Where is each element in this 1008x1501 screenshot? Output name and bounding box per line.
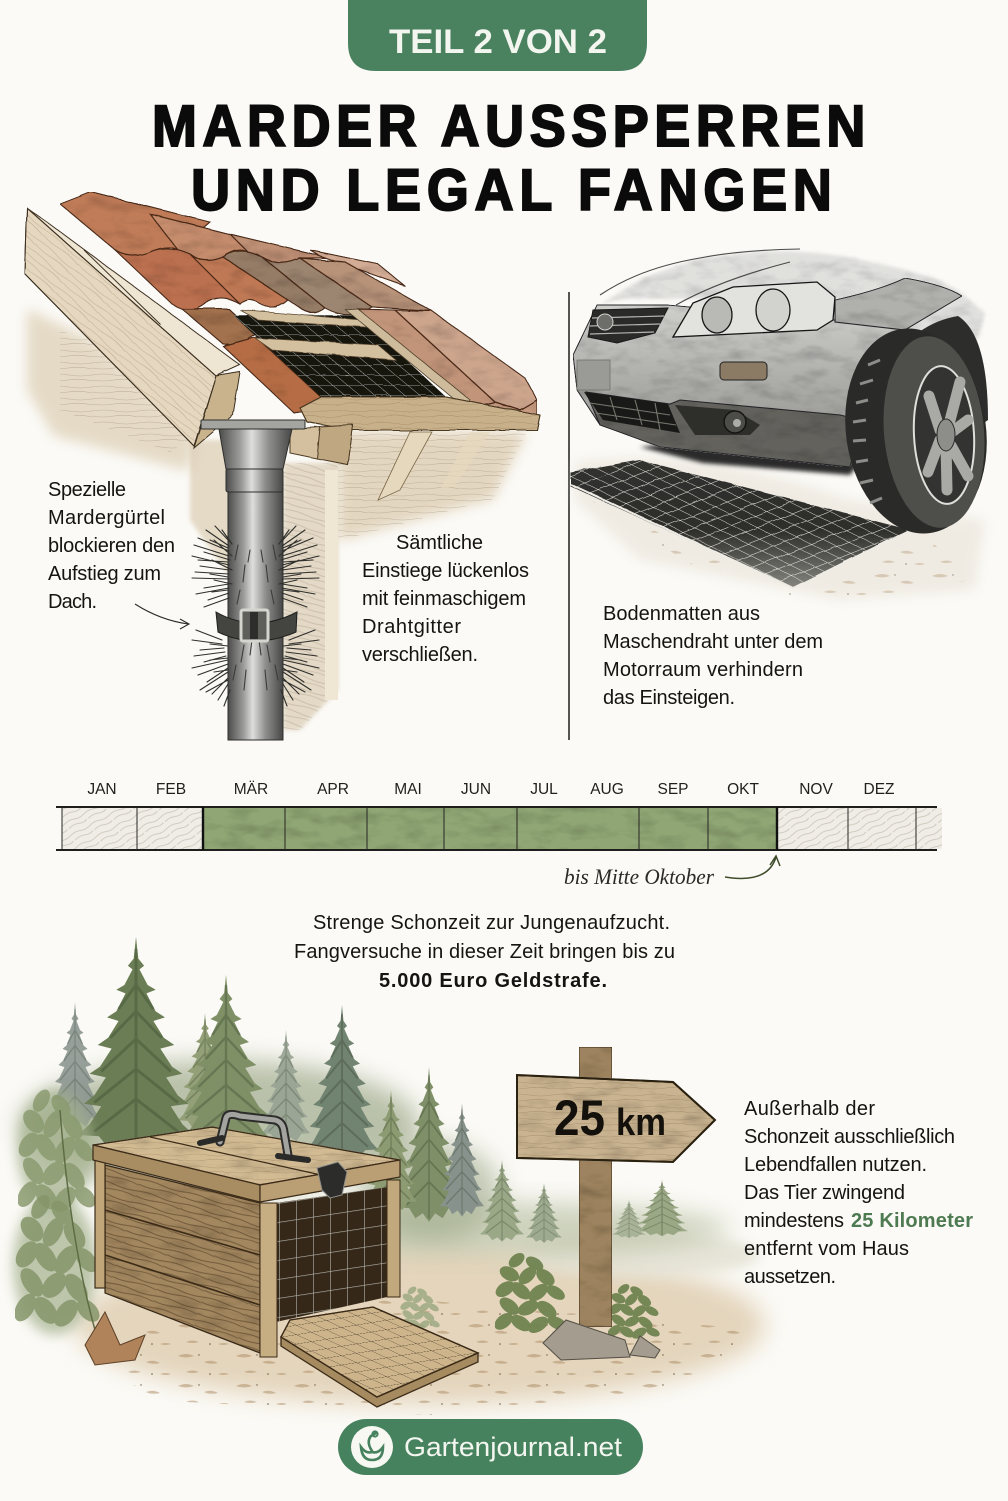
hood (597, 250, 987, 350)
text: Mardergürtel: Mardergürtel (48, 507, 165, 529)
text: Bodenmatten (603, 603, 823, 709)
month labels: JAN (87, 781, 117, 798)
vertical divider line (568, 292, 570, 740)
rocks (543, 1320, 660, 1360)
latch (317, 1162, 347, 1198)
text: Mardergürtel: Spezielle (48, 479, 126, 501)
note: bis Mitte Oktober: bis Mitte Oktober (564, 864, 714, 889)
month labels: FEB (156, 781, 186, 798)
month labels: AUG (590, 781, 624, 798)
text: live trap instructions: aussetzen. (744, 1266, 836, 1288)
distance sign: 25 (554, 1090, 605, 1146)
ground wash (575, 458, 985, 600)
trap opening with wire (276, 1187, 387, 1322)
bargeboard (25, 208, 240, 448)
closed season explanation: 5.000 Euro Geldstrafe. (379, 970, 607, 992)
header badge: Teil 2 von 2 (348, 0, 647, 71)
month labels: MAI (394, 781, 422, 798)
month labels: APR (317, 781, 349, 798)
text: Drahtgitter: verschließen. (362, 644, 478, 666)
hood lines (600, 249, 800, 305)
month labels: JUN (461, 781, 491, 798)
text: Drahtgitter: Drahtgitter (362, 616, 461, 638)
bristle belt (192, 526, 319, 706)
month labels: OKT (727, 781, 759, 798)
text: live trap instructions: Das Tier zwingend (744, 1182, 905, 1204)
text: Bodenmatten: Maschendraht unter dem (603, 631, 823, 653)
front posts (260, 1180, 400, 1357)
title (152, 93, 865, 222)
ground wash (75, 1202, 765, 1415)
text: live trap instructions: 25 Kilometer (851, 1210, 973, 1232)
live trap box (93, 1114, 478, 1407)
footer badge: Gartenjournal.net (338, 1419, 643, 1475)
text: live trap instructions: entfernt vom Haus (744, 1238, 909, 1260)
title: MARDER AUSSPERREN (152, 93, 865, 158)
text: Bodenmatten: das Einsteigen. (603, 687, 735, 709)
handle (200, 1114, 308, 1160)
text: Mardergürtel (48, 479, 175, 613)
note: bis Mitte Oktober (564, 856, 780, 889)
sign post (579, 1047, 612, 1327)
text: live trap instructions: Schonzeit ausschließlich (744, 1126, 955, 1148)
month labels: SEP (657, 781, 689, 798)
drop door (281, 1307, 478, 1407)
title: UND LEGAL FANGEN (191, 157, 832, 222)
illustration: car on wire mat (570, 249, 1000, 600)
front wheel (832, 319, 1000, 543)
text: live trap instructions (744, 1098, 973, 1288)
month labels (87, 781, 894, 798)
text: Drahtgitter (362, 532, 529, 666)
lid (93, 1127, 400, 1202)
wire ground mat (570, 460, 910, 588)
headlight (673, 282, 835, 337)
car body (573, 278, 962, 467)
header badge: Teil 2 von 2: TEIL 2 VON 2 (389, 23, 607, 61)
wheel arch shadow (880, 316, 988, 440)
text: Drahtgitter: Einstiege lückenlos (362, 560, 529, 582)
text: Drahtgitter: Sämtliche (396, 532, 483, 554)
text: Mardergürtel: Dach. (48, 591, 97, 613)
shrubs (11, 1085, 661, 1365)
downpipe (201, 420, 305, 740)
month labels: MÄR (234, 781, 268, 798)
text: live trap instructions: Lebendfallen nutzen. (744, 1154, 927, 1176)
illustration: forest with live trap and sign (11, 937, 765, 1415)
text: Bodenmatten: Motorraum verhindern (603, 659, 803, 681)
month labels: DEZ (864, 781, 894, 798)
closed season timeline bar (56, 807, 942, 850)
text: live trap instructions: Außerhalb der (744, 1098, 875, 1120)
month labels: JUL (530, 781, 558, 798)
under-car shadow (640, 440, 860, 475)
forest trees (20, 937, 688, 1243)
text: Bodenmatten: Bodenmatten aus (603, 603, 760, 625)
text: Mardergürtel: Aufstieg zum (48, 563, 161, 585)
text: live trap instructions: mindestens (744, 1210, 844, 1232)
distance sign (517, 1075, 715, 1162)
roof tiles (60, 192, 537, 420)
eave beam (290, 397, 540, 465)
closed season explanation: Fangversuche in dieser Zeit bringen bis zu (294, 941, 675, 963)
side panel (95, 1160, 260, 1353)
arrow to belt (135, 604, 189, 629)
closed season explanation (294, 912, 675, 992)
footer badge: Gartenjournal.net: Gartenjournal.net (404, 1432, 623, 1462)
icon: plant pot logo (351, 1426, 393, 1468)
bumper details (577, 360, 767, 435)
house wall and soffit wash (27, 309, 527, 730)
text: Drahtgitter: mit feinmaschigem (362, 588, 526, 610)
month labels: NOV (799, 781, 833, 798)
text: Mardergürtel: blockieren den (48, 535, 175, 557)
illustration: roof with wire mesh and downpipe (25, 192, 540, 740)
distance sign: km (616, 1102, 666, 1144)
closed season explanation: Strenge Schonzeit zur Jungenaufzucht. (313, 912, 670, 934)
grille (588, 308, 668, 343)
wire mesh opening (233, 309, 470, 408)
